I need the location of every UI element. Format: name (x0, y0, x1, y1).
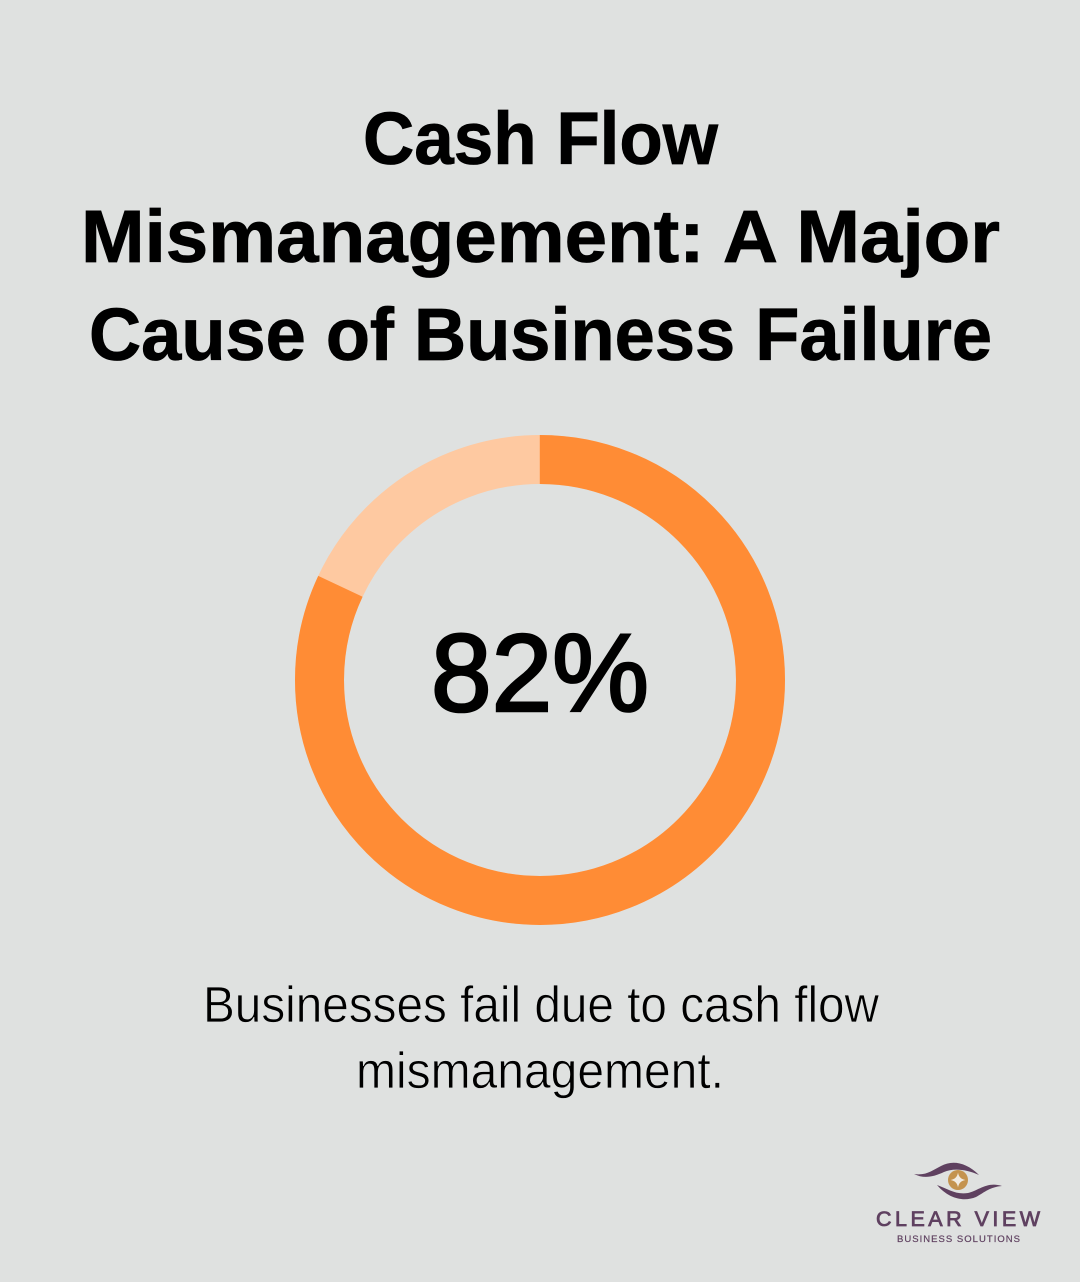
description text: Businesses fail due to cash flow (203, 976, 879, 1033)
percentage value: 82% (431, 612, 649, 735)
icon: eye with star (914, 1163, 1002, 1199)
title: Cause of Business Failure (89, 293, 992, 376)
logo tagline: BUSINESS SOLUTIONS (897, 1234, 1020, 1245)
donut chart: 82% (320, 460, 760, 900)
title: Mismanagement: A Major (81, 195, 1000, 278)
description text (203, 976, 879, 1099)
logo wordmark: CLEAR VIEW (876, 1207, 1041, 1231)
logo: Clear View Business Solutions (876, 1163, 1041, 1245)
title (81, 97, 1000, 376)
title: Cash Flow (363, 97, 718, 180)
description text: mismanagement. (356, 1042, 724, 1099)
